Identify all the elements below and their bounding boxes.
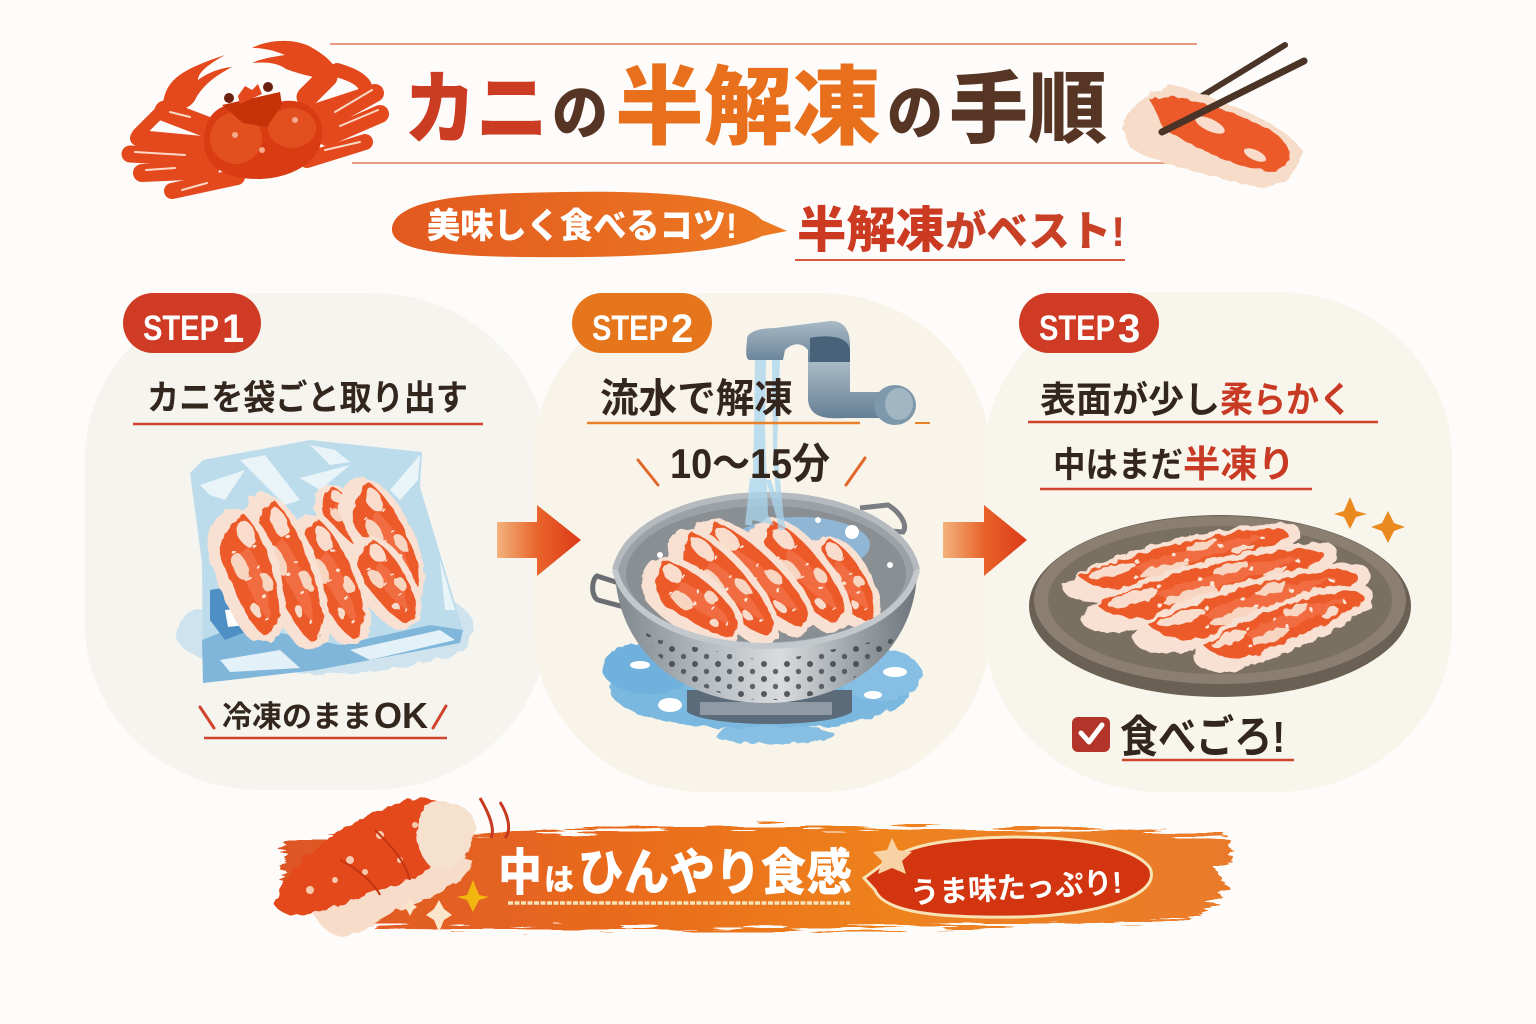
panel: step 1 background <box>85 293 547 790</box>
icon: frozen crab in bag <box>176 440 474 683</box>
panel: step 3 background <box>984 292 1452 792</box>
note: frozen ok: OK <box>374 695 428 736</box>
icon: star <box>873 838 912 874</box>
note: frozen ok <box>200 695 447 738</box>
icon: faucet <box>746 321 916 425</box>
icon: sparkles <box>1334 497 1405 543</box>
step 3 <box>1019 293 1411 762</box>
subtitle: 半解凍 <box>797 204 945 258</box>
brush stroke <box>282 826 1232 930</box>
icon: colander with crab <box>593 494 917 724</box>
badge: step 1: STEP <box>143 309 219 348</box>
step 2 <box>572 293 930 744</box>
heading: step 3: 表面が少し <box>1040 379 1220 420</box>
icon: running water <box>745 358 786 530</box>
heading: step 3: 半凍り <box>1183 444 1295 485</box>
badge: step 1 <box>123 293 261 353</box>
arrow: step 2 to 3 <box>943 505 1027 576</box>
step 1 <box>123 293 483 738</box>
icon: crab meat with chopsticks <box>1122 45 1304 187</box>
icon: water puddle <box>602 642 922 744</box>
heading: step 3 <box>1028 379 1378 489</box>
badge: step 2: STEP <box>592 309 668 348</box>
subtitle <box>392 192 1125 260</box>
heading: step 1: カニを袋ごと取り出す <box>147 379 468 418</box>
banner headline: ひんやり食感 <box>578 845 852 901</box>
badge: step 2: 2 <box>671 307 693 351</box>
banner headline: は <box>544 864 574 897</box>
icon: sparkles <box>403 880 489 932</box>
callout: tip bubble <box>392 192 787 257</box>
badge: step 3: STEP <box>1039 309 1115 348</box>
badge: step 1: 1 <box>222 307 244 351</box>
title block <box>330 44 1197 163</box>
panel: step 2 background <box>533 293 991 792</box>
icon: thawed crab <box>275 797 476 936</box>
callout: umami: うま味たっぷり! <box>909 866 1123 911</box>
arrow: step 1 to 2 <box>497 505 581 576</box>
callout: umami <box>864 837 1151 917</box>
banner: bottom <box>275 797 1232 936</box>
icon: chill marks <box>480 798 509 838</box>
icon: crab <box>130 41 380 191</box>
label: duration: 10〜15分 <box>670 440 830 487</box>
title block: カニ <box>404 65 548 154</box>
badge: step 2 <box>572 293 712 353</box>
icon: checkbox <box>1072 717 1110 752</box>
title block: 半解凍 <box>615 60 881 156</box>
badge: step 3: 3 <box>1118 307 1140 351</box>
icon: plate of crab <box>1029 507 1411 697</box>
note: ready to eat: 食べごろ! <box>1120 713 1285 762</box>
title block: 手順 <box>949 65 1107 153</box>
subtitle: がベスト! <box>945 208 1125 255</box>
badge: step 3 <box>1019 293 1159 353</box>
note: frozen ok: 冷凍のまま <box>222 701 372 734</box>
title block: の <box>552 80 608 147</box>
title block: の <box>887 80 943 147</box>
heading: step 3: 中はまだ <box>1053 446 1183 485</box>
heading: step 2: 流水で解凍 <box>600 377 793 421</box>
banner headline <box>498 845 852 903</box>
heading: step 3: 柔らかく <box>1220 379 1352 420</box>
callout: tip bubble: 美味しく食べるコツ! <box>427 207 737 246</box>
banner headline: 中 <box>498 845 542 901</box>
